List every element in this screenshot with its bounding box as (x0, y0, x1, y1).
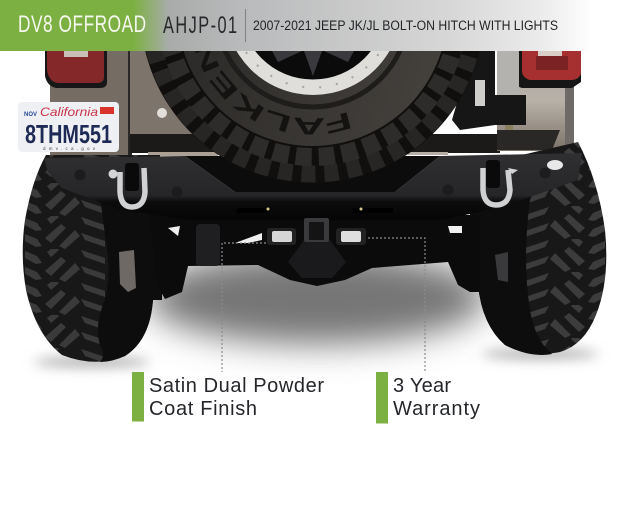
brand name: DV8 OFFROAD (18, 11, 146, 38)
tire carrier hinge (157, 51, 526, 130)
license plate (18, 102, 119, 152)
dotted leader: warranty (368, 238, 425, 372)
right LED light (336, 228, 366, 245)
right rear tire (470, 142, 606, 355)
suspension and axle (150, 215, 480, 299)
header banner (0, 0, 592, 51)
callout: warranty: 3 Year (393, 375, 451, 397)
ground shadow (34, 252, 598, 367)
callout: powder coat finish: Satin Dual Powder (149, 375, 324, 397)
right shackle (483, 160, 518, 205)
license plate: California (40, 105, 98, 119)
spare tire (145, 51, 478, 182)
left rear tire (23, 155, 162, 362)
rear bumper (44, 153, 582, 220)
callout: powder coat finish: Coat Finish (149, 398, 257, 420)
jeep product photo (18, 51, 606, 362)
jeep body (50, 51, 574, 156)
wheel rim (236, 51, 390, 95)
product title: 2007-2021 JEEP JK/JL BOLT-ON HITCH WITH LIGHTS (253, 18, 558, 33)
license plate: dmv.ca.gov (43, 146, 96, 151)
trailer hitch receiver (304, 218, 329, 242)
tire sidewall lettering: FALKEN (194, 51, 350, 134)
callout: warranty: Warranty (393, 398, 480, 420)
callout: powder coat finish (132, 372, 324, 422)
left LED light (267, 228, 296, 245)
license plate: NOV (24, 112, 37, 118)
tail lights (45, 51, 581, 88)
part number: AHJP-01 (163, 12, 237, 39)
dotted leader: powder coat (222, 243, 266, 372)
callout: warranty (376, 372, 480, 424)
license plate: 8THM551 (25, 119, 112, 149)
left shackle (108, 163, 145, 207)
